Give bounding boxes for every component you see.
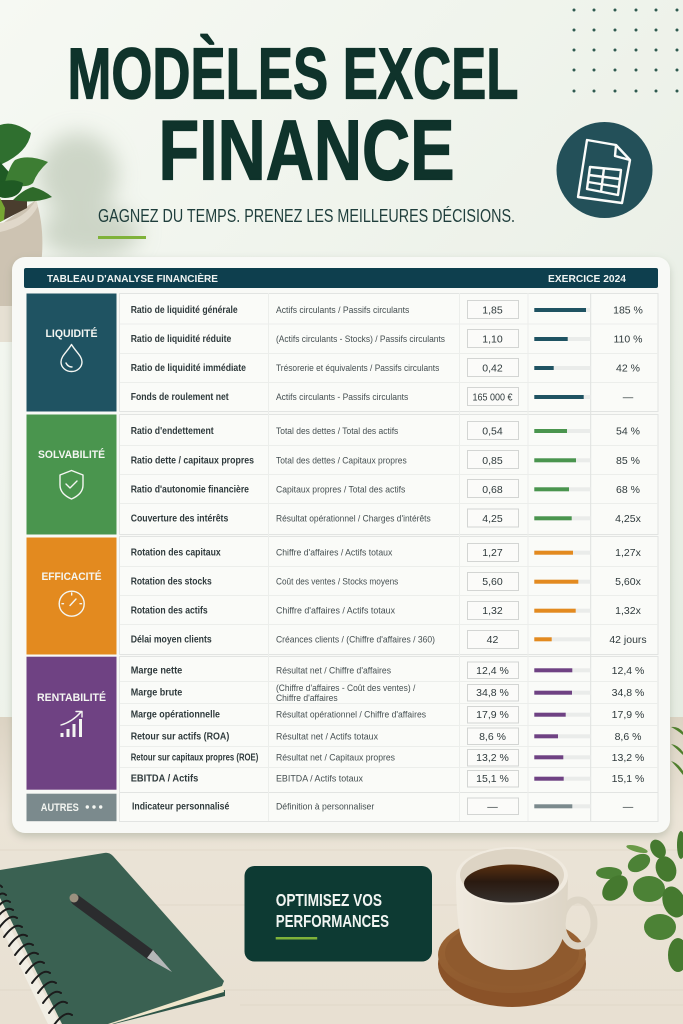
row: rotation des actifs: 1,32x [615,605,642,617]
row: rotation des actifs: 1,32 [482,605,503,617]
row: rotation des capitaux: Rotation des capitaux [131,548,221,559]
row: délai moyen clients [131,630,647,648]
row: ratio de liquidité immédiate: 0,42 [482,362,503,374]
row: marge nette [131,662,644,678]
card shadow [12,260,670,837]
row: ebitda / actifs: EBITDA / Actifs totaux [276,774,363,784]
category: autres [26,794,116,821]
row: ratio d'autonomie financière: 68 % [616,484,640,496]
category: solvabilité [26,414,116,534]
row: ratio de liquidité réduite: (Actifs circulants - Stocks) / Passifs circulants [276,334,445,344]
background: wall [0,0,683,720]
row: indicateur personnalisé: Indicateur personnalisé [132,801,230,812]
row: ratio de liquidité immédiate: Trésorerie et équivalents / Passifs circulants [276,363,440,373]
row: ratio de liquidité immédiate: 42 % [616,362,640,374]
row: retour sur actifs (ROA): 8,6 % [479,731,506,743]
row: marge nette: 12,4 % [612,665,644,677]
category: efficacité [26,538,116,654]
row: marge opérationnelle: Marge opérationnelle [131,710,220,721]
row: ebitda / actifs: EBITDA / Actifs [131,774,199,785]
row: marge nette: Marge nette [131,665,183,676]
row: indicateur personnalisé [132,798,634,814]
row: ratio de liquidité immédiate [131,358,640,376]
row: fonds de roulement net [131,388,634,406]
row: ebitda / actifs: 15,1 % [612,773,644,785]
table header bar: EXERCICE 2024 [548,273,626,285]
row: marge brute: 34,8 % [476,687,509,699]
row: rotation des actifs: Chiffre d'affaires / Actifs totaux [276,606,395,616]
subtitle: GAGNEZ DU TEMPS. PRENEZ LES MEILLEURES DÉCISIONS. [98,206,515,226]
dot grid [572,8,678,92]
table grid [120,293,658,822]
category: solvabilité: SOLVABILITÉ [38,448,105,461]
row: couverture des intérêts: Couverture des intérêts [131,513,229,524]
row: rotation des capitaux: 1,27 [482,547,503,559]
category: liquidité: LIQUIDITÉ [46,327,98,340]
row: ratio d'autonomie financière: 0,68 [482,484,503,496]
panel: financial analysis table card [12,257,670,833]
title: FINANCE [158,104,454,198]
row: marge brute: (Chiffre d'affaires - Coût des ventes) / [276,683,416,693]
row: ratio d'endettement: 0,54 [482,426,503,438]
row: ratio dette / capitaux propres [131,450,640,468]
row: ratio de liquidité réduite: Ratio de liquidité réduite [131,334,232,345]
row: marge brute: 34,8 % [612,687,644,699]
table header bar [24,268,658,288]
table header bar: TABLEAU D'ANALYSE FINANCIÈRE [47,272,218,285]
row: rotation des capitaux: 1,27x [615,547,642,559]
row: retour sur actifs (ROA) [131,728,641,744]
call-to-action box [244,866,432,962]
row: retour sur actifs (ROA): Résultat net / Actifs totaux [276,731,378,741]
row: marge brute: Marge brute [131,688,183,699]
row: ratio d'autonomie financière: Ratio d'autonomie financière [131,484,249,495]
row: délai moyen clients: Créances clients / (Chiffre d'affaires / 360) [276,634,435,644]
row: ratio de liquidité réduite: 1,10 [482,334,503,346]
row: ratio dette / capitaux propres: 85 % [616,455,640,467]
subtitle [98,206,515,239]
row: ebitda / actifs: 15,1 % [476,773,509,785]
row: retour sur actifs (ROA): 8,6 % [615,731,641,743]
row: ratio d'endettement: Total des dettes / Total des actifs [276,426,399,436]
row: marge nette: Résultat net / Chiffre d'affaires [276,665,391,675]
row: indicateur personnalisé: — [487,801,498,813]
row: rotation des stocks: Coût des ventes / Stocks moyens [276,577,399,587]
category: autres: AUTRES [41,802,79,814]
row: rotation des actifs: Rotation des actifs [131,606,208,617]
call-to-action box: PERFORMANCES [276,911,389,931]
category: liquidité [26,294,116,412]
row: retour sur capitaux propres (ROE): Retour sur capitaux propres (ROE) [131,752,258,763]
row: rotation des capitaux [131,544,642,562]
green leaves, bottom right [596,831,683,972]
row: retour sur capitaux propres (ROE) [131,750,644,766]
row: couverture des intérêts [131,509,642,527]
row: retour sur capitaux propres (ROE): Résultat net / Capitaux propres [276,752,395,762]
row: fonds de roulement net: 165 000 € [472,392,513,404]
row: indicateur personnalisé: Définition à personnaliser [276,801,374,811]
row: fonds de roulement net: — [623,392,634,404]
row: ratio de liquidité générale: 1,85 [482,304,503,316]
row: indicateur personnalisé: — [623,801,634,813]
row: ratio d'endettement: 54 % [616,426,640,438]
category: rentabilité: RENTABILITÉ [37,691,106,704]
right plant behind the card [671,727,683,775]
row: marge brute [131,683,644,703]
row: délai moyen clients: 42 jours [609,634,647,646]
row: couverture des intérêts: 4,25x [615,513,642,525]
row: ratio d'autonomie financière: Capitaux propres / Total des actifs [276,484,406,494]
row: ratio de liquidité générale: Actifs circulants / Passifs circulants [276,305,410,315]
row: retour sur capitaux propres (ROE): 13,2 % [612,752,644,764]
title [68,34,518,198]
decorative plant shadow [38,133,140,258]
row: ratio de liquidité immédiate: Ratio de liquidité immédiate [131,363,246,374]
row: fonds de roulement net: Fonds de roulement net [131,392,229,403]
icon: spreadsheet file badge [556,122,652,218]
row: couverture des intérêts: Résultat opérationnel / Charges d'intérêts [276,513,431,523]
row: rotation des stocks: 5,60x [615,576,642,588]
category: rentabilité [26,657,116,790]
row: ratio dette / capitaux propres: Total des dettes / Capitaux propres [276,455,407,465]
background: wooden desk [0,717,683,1024]
row: rotation des stocks: Rotation des stocks [131,577,212,588]
row: ratio de liquidité réduite: 110 % [614,334,642,346]
row: fonds de roulement net: Actifs circulants - Passifs circulants [276,392,409,402]
row: marge opérationnelle: 17,9 % [476,709,509,721]
row: délai moyen clients: Délai moyen clients [131,634,212,645]
call-to-action box: OPTIMISEZ VOS [276,890,382,910]
row: ratio d'endettement: Ratio d'endettement [131,426,214,437]
row: retour sur actifs (ROA): Retour sur actifs (ROA) [131,731,229,742]
coffee mug on wooden coaster [438,847,594,1007]
row: ebitda / actifs [131,770,644,787]
row: délai moyen clients: 42 [487,634,498,646]
row: marge nette: 12,4 % [476,665,509,677]
pen [70,894,172,972]
title: MODÈLES EXCEL [68,34,518,114]
notebook with spiral binding [0,853,225,1024]
row: marge opérationnelle: Résultat opérationnel / Chiffre d'affaires [276,710,426,720]
row: marge opérationnelle: 17,9 % [612,709,644,721]
row: ratio d'autonomie financière [131,480,640,498]
row: rotation des capitaux: Chiffre d'affaires / Actifs totaux [276,548,393,558]
shelf [0,306,14,342]
plant and pot, top left [0,124,52,306]
row: couverture des intérêts: 4,25 [482,513,503,525]
row: ratio d'endettement [131,422,640,440]
row: marge brute: Chiffre d'affaires [276,693,338,703]
category: efficacité: EFFICACITÉ [42,570,102,583]
row: ratio de liquidité générale: 185 % [613,304,643,316]
row: ratio de liquidité générale [131,300,643,318]
row: retour sur capitaux propres (ROE): 13,2 % [476,752,509,764]
row: rotation des stocks [131,572,642,590]
row: ratio de liquidité réduite [131,330,642,348]
row: ratio dette / capitaux propres: Ratio dette / capitaux propres [131,455,254,466]
row: rotation des actifs [131,602,642,620]
row: rotation des stocks: 5,60 [482,576,503,588]
row: marge opérationnelle [131,706,644,723]
row: ratio dette / capitaux propres: 0,85 [482,455,503,467]
row: ratio de liquidité générale: Ratio de liquidité générale [131,305,238,316]
